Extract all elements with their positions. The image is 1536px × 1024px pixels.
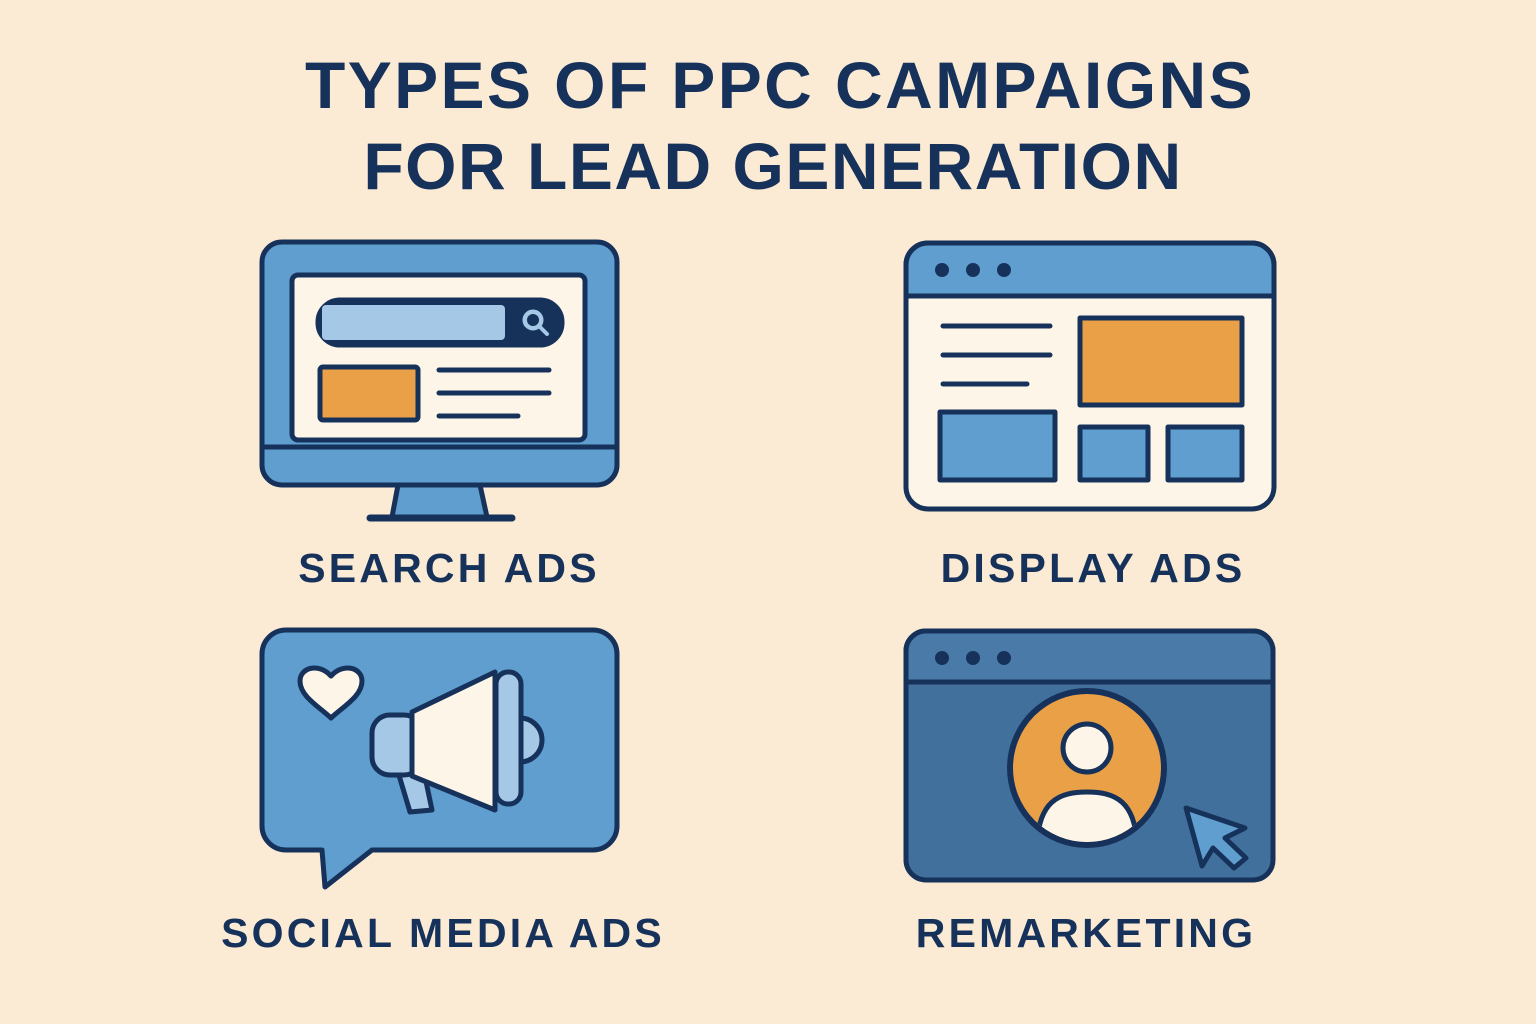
title: TYPES OF PPC CAMPAIGNS (305, 48, 1255, 122)
label: search ads: SEARCH ADS (298, 545, 600, 591)
title: FOR LEAD GENERATION (363, 129, 1183, 203)
label: social media ads: SOCIAL MEDIA ADS (221, 910, 665, 956)
label: display ads: DISPLAY ADS (941, 545, 1245, 591)
icon: remarketing browser (906, 631, 1273, 880)
icon: display ads browser (906, 243, 1274, 509)
title (305, 48, 1255, 203)
icon: social media speech bubble (262, 630, 617, 887)
label: remarketing: REMARKETING (916, 910, 1256, 956)
icon: search ads monitor (262, 242, 617, 518)
